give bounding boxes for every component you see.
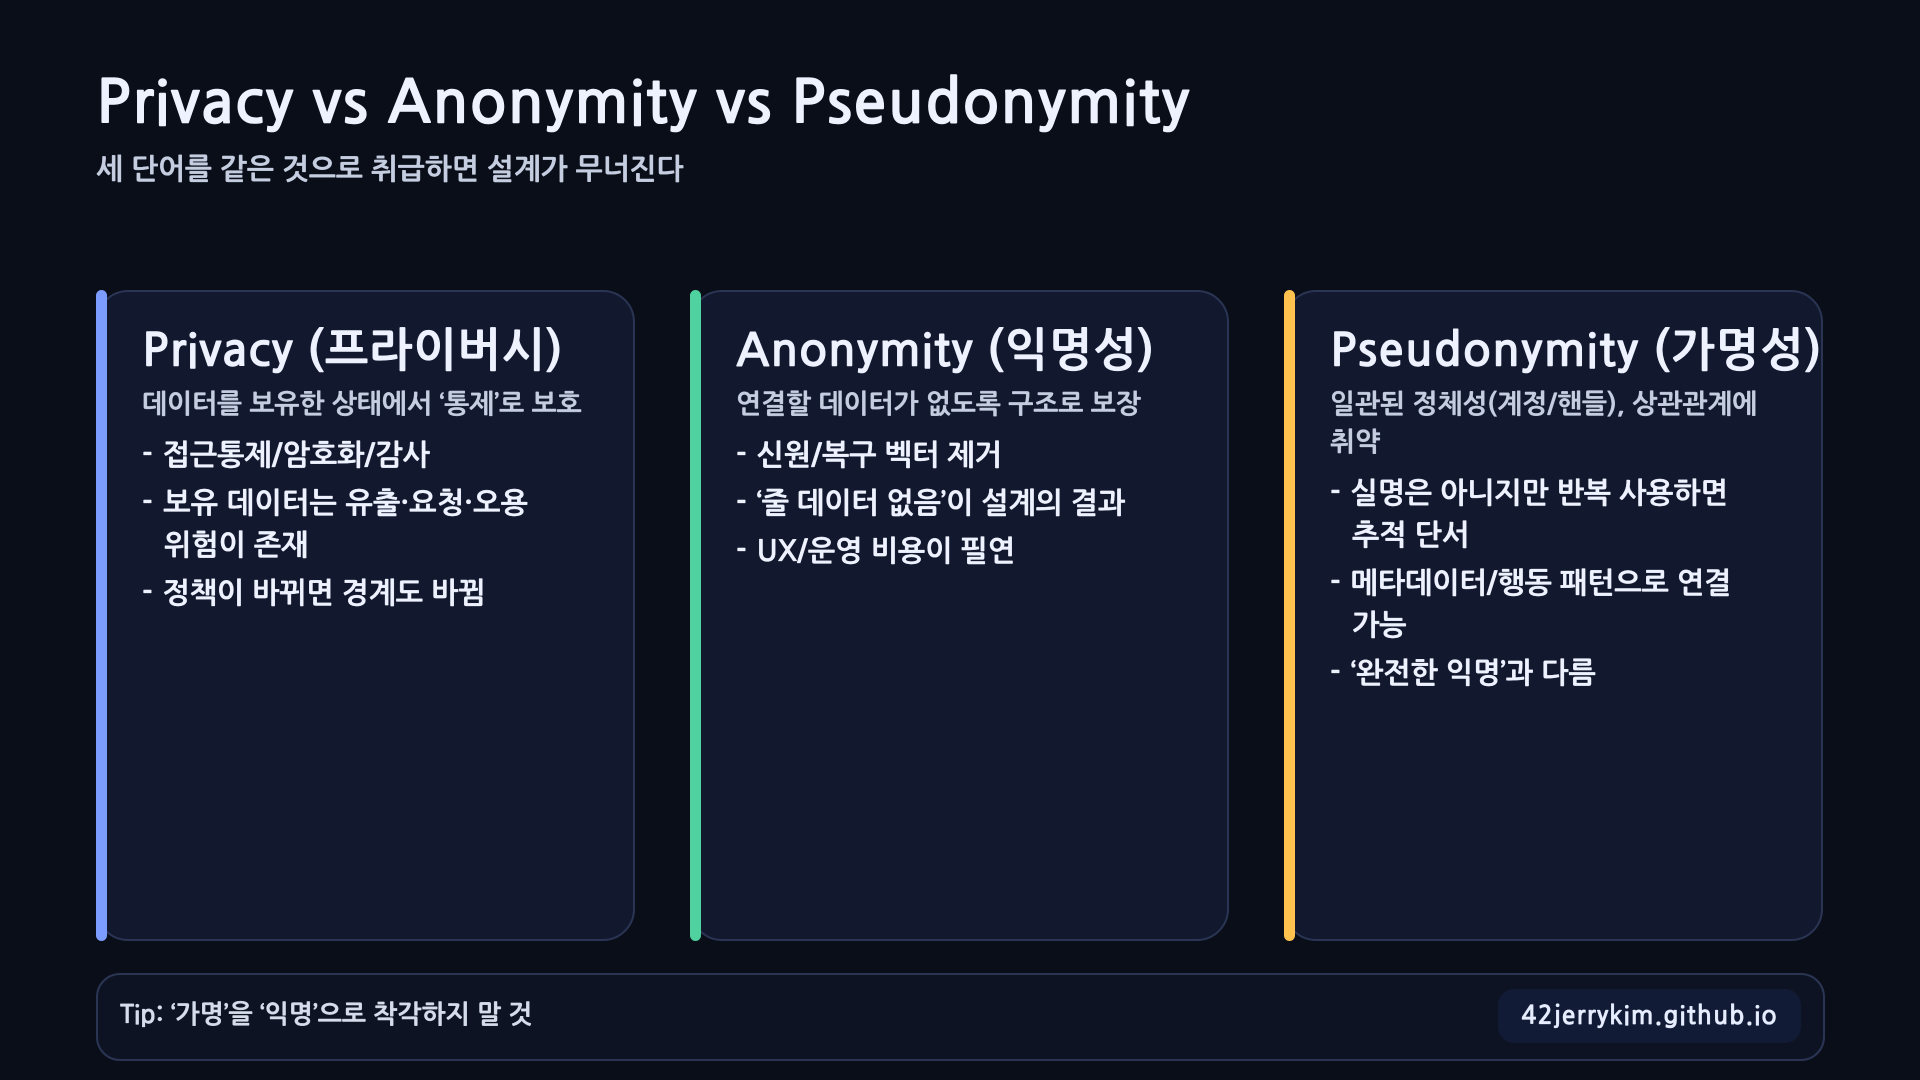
bullets: privacy: 위험이 존재 — [164, 532, 308, 560]
bullets: privacy: - 보유 데이터는 유출·요청·오용 — [142, 490, 528, 518]
badge: site url — [1498, 989, 1801, 1043]
description: pseudonymity: 취약 — [1330, 429, 1380, 455]
bullets: privacy — [142, 440, 528, 608]
bullets: pseudonymity: - 메타데이터/행동 패턴으로 연결 — [1330, 570, 1731, 598]
badge: site url: 42jerrykim.github.io — [1521, 1003, 1778, 1028]
panel: pseudonymity — [1284, 290, 1823, 941]
bullets: anonymity — [736, 440, 1126, 566]
description: privacy: 데이터를 보유한 상태에서 ‘통제’로 보호 — [142, 391, 582, 417]
heading: anonymity: Anonymity (익명성) — [736, 327, 1155, 373]
footer bar — [96, 973, 1825, 1061]
description: pseudonymity: 일관된 정체성(계정/핸들), 상관관계에 — [1330, 391, 1757, 417]
heading: pseudonymity: Pseudonymity (가명성) — [1330, 327, 1823, 373]
bullets: anonymity: - UX/운영 비용이 필연 — [736, 538, 1015, 566]
accent bar: yellow — [1284, 290, 1295, 941]
accent bar: green — [690, 290, 701, 941]
description: anonymity: 연결할 데이터가 없도록 구조로 보장 — [736, 391, 1141, 417]
bullets: pseudonymity: 가능 — [1352, 612, 1407, 640]
bullets: pseudonymity: 추적 단서 — [1352, 522, 1469, 550]
bullets: pseudonymity: - ‘완전한 익명’과 다름 — [1330, 660, 1596, 688]
bullets: privacy: - 정책이 바뀌면 경계도 바뀜 — [142, 580, 485, 608]
bullets: privacy: - 접근통제/암호화/감사 — [142, 442, 430, 470]
panel: anonymity — [690, 290, 1229, 941]
bullets: anonymity: - ‘줄 데이터 없음’이 설계의 결과 — [736, 490, 1125, 518]
description: pseudonymity — [1330, 390, 1757, 455]
title: Privacy vs Anonymity vs Pseudonymity — [96, 73, 1191, 132]
heading: privacy: Privacy (프라이버시) — [142, 327, 563, 373]
tip text: Tip: ‘가명’을 ‘익명’으로 착각하지 말 것 — [120, 1001, 532, 1027]
subtitle: 세 단어를 같은 것으로 취급하면 설계가 무너진다 — [96, 156, 684, 184]
panel: privacy — [96, 290, 635, 941]
bullets: anonymity: - 신원/복구 벡터 제거 — [736, 442, 1002, 470]
bullets: pseudonymity — [1330, 478, 1731, 688]
accent bar: blue — [96, 290, 107, 941]
bullets: pseudonymity: - 실명은 아니지만 반복 사용하면 — [1330, 480, 1728, 508]
